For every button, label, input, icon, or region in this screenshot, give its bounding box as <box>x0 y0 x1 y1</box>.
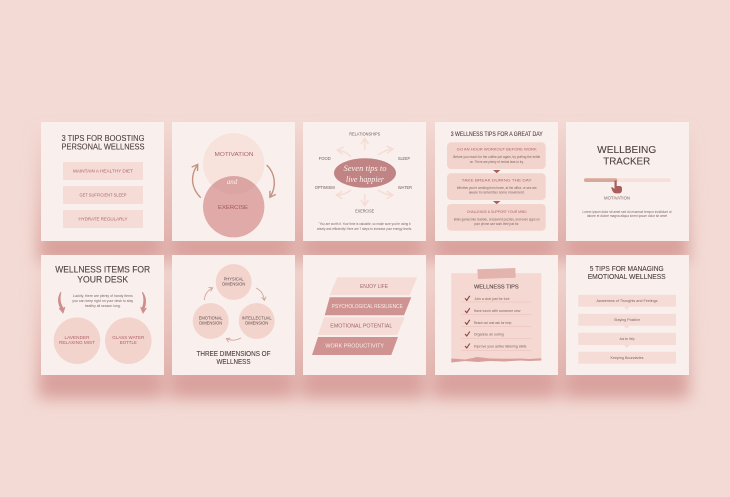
tip card 2: aware to remember some movement. <box>469 190 525 194</box>
tip card 3: CHALLENGE & SUPPORT YOUR MIND <box>467 210 527 214</box>
step 1: Awareness of Thoughts and Feelings <box>596 298 658 303</box>
checklist text: Have lunch with someone new <box>474 308 521 313</box>
tip boxes: HYDRATE REGULARLY <box>78 216 128 222</box>
spoke labels: WATER <box>398 185 413 190</box>
step 2: Staying Positive <box>614 317 641 322</box>
tip card 1 <box>447 142 546 169</box>
item circle: glass water bottle: GLASS WATER <box>112 335 145 340</box>
intro text <box>72 294 133 308</box>
checklist text: Reach out and ask for help <box>474 320 511 325</box>
panel: wellness tips note <box>435 255 558 375</box>
venn diagram: and <box>227 178 238 186</box>
heading: TRACKER <box>603 156 650 168</box>
tip card 2: Whether you're working from home, at the office, or see are <box>457 186 537 190</box>
tip boxes <box>63 162 143 228</box>
tip card 3 <box>447 204 546 231</box>
label: motivation: MOTIVATION <box>604 196 630 200</box>
item circle: glass water bottle <box>105 317 152 364</box>
arrow: right down <box>140 292 146 313</box>
panel: wellness items for your desk <box>41 255 164 375</box>
item circle: lavender: RELAXING MIST <box>59 340 95 345</box>
band: work productivity: WORK PRODUCTIVITY <box>325 343 385 349</box>
cycle arrows <box>204 288 264 340</box>
panel: 3 tips for boosting personal wellness <box>41 122 164 241</box>
arrow marker 2 <box>493 201 500 204</box>
panel: 5 tips for managing emotional wellness <box>566 255 689 375</box>
spoke labels: OPTIMISM <box>315 185 335 190</box>
heading <box>588 266 666 281</box>
body text: labore et dolore magna aliqua lorem ipsum dolor sit amet <box>587 214 667 218</box>
panel: seven tips to live happier <box>303 122 426 241</box>
progress bar <box>584 178 671 182</box>
panel: wellbeing tracker <box>566 122 689 241</box>
band: psychological resilience: PSYCHOLOGICAL RESILIENCE <box>332 304 403 310</box>
intro text: you can keep right on your desk to stay <box>72 299 133 303</box>
band: emotional potential: EMOTIONAL POTENTIAL <box>330 324 393 330</box>
tip card 1: GO AN HOUR WORKOUT BEFORE WORK <box>457 148 537 152</box>
panel: motivation and exercise <box>172 122 295 241</box>
spoke labels: SLEEP <box>398 156 410 161</box>
caption: wisely and efficiently! Here are 7 steps to increase your energy levels. <box>317 227 412 231</box>
panel: three dimensions of wellness <box>172 255 295 375</box>
heading: 5 TIPS FOR MANAGING <box>590 266 664 273</box>
spoke labels: EXERCISE <box>355 208 374 214</box>
item circle: glass water bottle: BOTTLE <box>120 340 137 345</box>
arrow marker 1 <box>493 170 500 173</box>
spoke arrows <box>337 139 392 205</box>
tip card 2 <box>447 173 546 200</box>
circle: physical dimension <box>216 264 252 300</box>
checklist text: Organize an outing <box>474 332 504 337</box>
heading: WELLNESS <box>216 357 250 366</box>
tip boxes: GET SUFFICIENT SLEEP <box>80 192 126 198</box>
heading: 3 WELLNESS TIPS FOR A GREAT DAY <box>451 132 543 138</box>
heading <box>196 349 271 366</box>
heading: 3 tips: PERSONAL WELLNESS <box>62 142 144 152</box>
step 3: Ask for Help <box>620 336 635 341</box>
heading: EMOTIONAL WELLNESS <box>588 274 666 281</box>
checklist text: Improve your active listening skills <box>474 344 526 348</box>
arrow: left cycle <box>193 165 201 198</box>
heading <box>597 145 656 168</box>
circle: physical dimension: DIMENSION <box>222 282 245 286</box>
torn edge <box>451 357 541 362</box>
venn diagram <box>203 133 264 237</box>
item circle: lavender <box>54 317 100 364</box>
tip card 1: Before you reach for the coffee pot again, try putting the kettle <box>453 155 540 159</box>
checklist text <box>474 296 526 348</box>
centre ellipse <box>334 158 396 188</box>
tip card 2: TAKE BREAK DURING THE DAY <box>462 179 532 183</box>
circle: intellectual dimension: DIMENSION <box>245 320 268 326</box>
icon: pointing hand <box>611 180 622 193</box>
circle: physical dimension: PHYSICAL <box>224 276 244 282</box>
band: enjoy life: ENJOY LIFE <box>360 284 389 290</box>
heading: THREE DIMENSIONS OF <box>196 349 271 358</box>
item circle: lavender: LAVENDER <box>64 335 90 340</box>
checkmarks <box>465 296 470 348</box>
tip card 3: Brain games like Sudoku, crossword puzzles, and even apps on <box>454 218 540 222</box>
circle: emotional dimension <box>193 303 229 339</box>
step 4: Keeping Boundaries <box>610 355 644 360</box>
spoke labels <box>315 132 413 214</box>
arrow: right cycle <box>267 165 274 197</box>
intro text: Luckily, there are plenty of handy items <box>73 294 133 298</box>
heading: 3 tips: 3 TIPS FOR BOOSTING <box>62 134 144 143</box>
heading: 3 tips <box>62 134 144 152</box>
panel: 3 wellness tips for a great day <box>435 122 558 241</box>
heading: WELLNESS ITEMS FOR <box>55 264 151 274</box>
intro text: healthy all season long. <box>85 304 121 308</box>
venn diagram: MOTIVATION <box>214 152 254 158</box>
circle: intellectual dimension: INTELLECTUAL <box>242 316 272 320</box>
tip card 3: your phone can work their just for. <box>474 222 519 226</box>
tip card 1: on. There are plenty of herbal teas to try. <box>470 160 524 164</box>
spoke labels: RELATIONSHIPS <box>349 132 380 136</box>
circle: emotional dimension: DIMENSION <box>199 320 222 326</box>
tape <box>477 268 516 279</box>
heading: YOUR DESK <box>77 274 128 284</box>
body text: Lorem ipsum dolor sit amet sed do eiusmod tempor incididunt ut <box>582 210 672 214</box>
spoke labels: FOOD <box>319 156 331 161</box>
heading: WELLBEING <box>597 145 656 156</box>
venn diagram: EXERCISE <box>218 205 248 211</box>
heading <box>55 264 151 284</box>
tip boxes: MAINTAIN A HEALTHY DIET <box>73 168 133 174</box>
centre ellipse: live happier <box>346 174 385 184</box>
panel: slanted list <box>303 255 426 375</box>
centre ellipse: Seven tips to <box>344 163 386 173</box>
heading: WELLNESS TIPS <box>474 285 519 291</box>
note paper <box>451 273 541 360</box>
caption <box>317 222 412 231</box>
divider lines <box>461 302 531 350</box>
caption: "You are worth it. Your time is valuable, so make sure you're using it <box>318 222 410 226</box>
arrow: left down <box>58 292 65 313</box>
circle: intellectual dimension <box>239 303 275 339</box>
body text <box>582 210 672 218</box>
circle: emotional dimension: EMOTIONAL <box>199 316 223 320</box>
checklist text: Join a club just for fun! <box>474 296 510 301</box>
card shadows <box>38 130 689 398</box>
